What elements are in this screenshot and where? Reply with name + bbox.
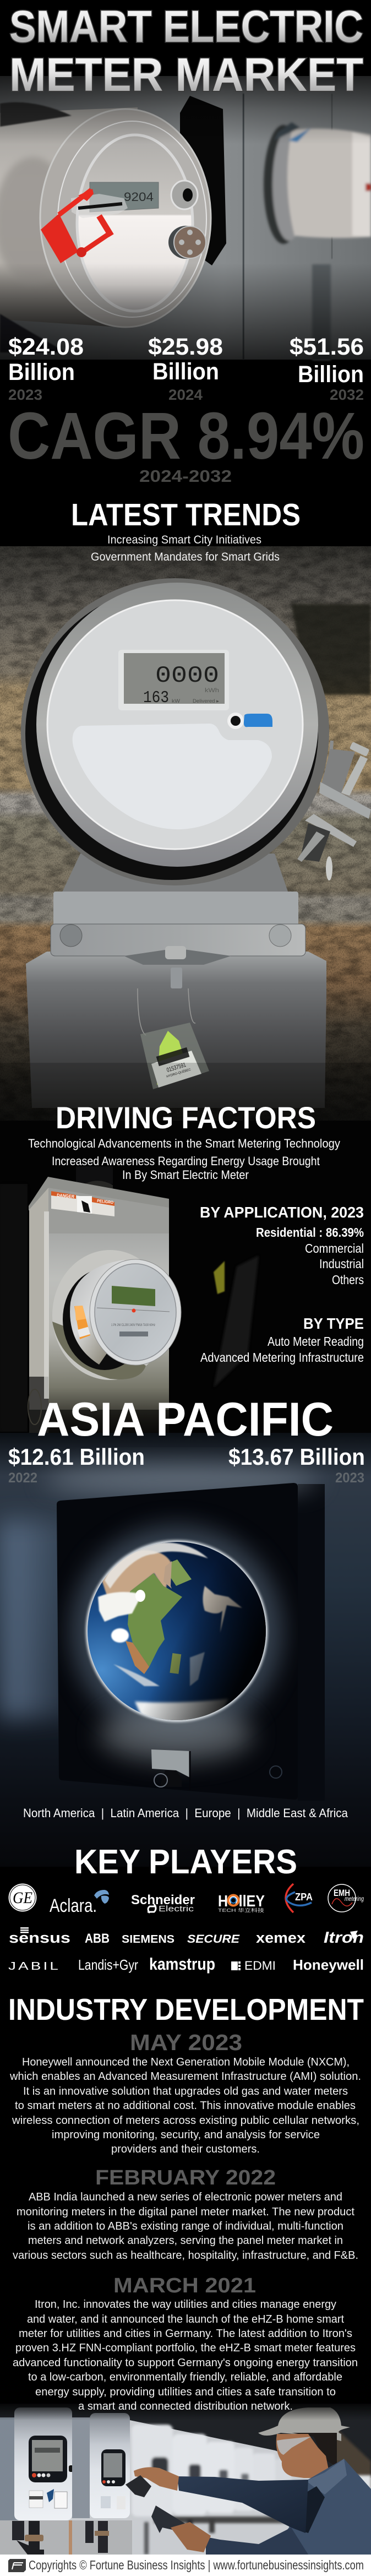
text block: Honeywell: improving monitoring, security, and analysis for service	[52, 2128, 320, 2141]
heading: LATEST TRENDS	[71, 497, 301, 532]
2022 value	[8, 1444, 145, 1486]
icon: steel mounting band	[51, 892, 305, 988]
logo: EDMI	[231, 1959, 276, 1972]
text block: Honeywell: Honeywell announced the Next Generation Mobile Module (NXCM),	[22, 2056, 350, 2068]
heading: DRIVING FACTORS	[56, 1100, 316, 1135]
stat: 2024 market value: Billion	[152, 358, 219, 385]
meter probe	[126, 2475, 151, 2497]
logo: Aclara: Aclara.	[50, 1895, 97, 1916]
logo: Xemex: xemex	[256, 1930, 305, 1946]
metal reset button	[168, 226, 206, 259]
panel: technician reading smart meters photo	[0, 2404, 371, 2555]
panel: dark photo of meter box	[0, 1121, 371, 1437]
2023 value	[228, 1444, 365, 1486]
logo: Siemens: SIEMENS	[122, 1933, 174, 1945]
icon: meter outer ring	[21, 578, 329, 885]
text block: ABB India	[13, 2191, 358, 2262]
date: May 2023: MAY 2023	[130, 2030, 242, 2055]
section: latest trends	[71, 497, 301, 563]
text block: Itron: and water, and it announced the launch of the eHZ-B home smart	[27, 2313, 344, 2325]
icon: white nameplate area	[73, 724, 272, 829]
icon: Fortune Business Insights logo	[8, 2559, 26, 2572]
factor item 2: In By Smart Electric Meter	[122, 1168, 249, 1182]
icon: meter bracket	[62, 854, 288, 893]
logo: Secure: SECURE	[187, 1933, 240, 1945]
trend item 2: Government Mandates for Smart Grids	[91, 550, 280, 563]
other regions list: North America | Latin America | Europe | Middle East & Africa	[23, 1806, 348, 1820]
land: southern desert	[126, 1641, 149, 1674]
section: industry development	[8, 1992, 364, 2297]
panel: meter on concrete wall photo	[0, 546, 371, 1121]
text block: Honeywell	[9, 2056, 361, 2155]
icon: dark wall panel	[57, 1483, 298, 1800]
text block: Itron	[13, 2298, 358, 2412]
ceiling shadow	[0, 2404, 371, 2478]
handheld reader	[151, 2506, 187, 2533]
stat: 2032 market value: 2032	[330, 387, 364, 403]
logo: Schneider Electric: Electric	[159, 1904, 194, 1914]
holding hand	[171, 2522, 211, 2552]
clouds	[105, 1542, 208, 1589]
LCD units: kWh	[205, 687, 219, 694]
2022 value: $12.61 Billion	[8, 1444, 145, 1470]
icon: meter enclosure	[28, 1166, 181, 1437]
orange barcode sticker	[74, 1306, 90, 1339]
logo: Kamstrup: kamstrup	[149, 1954, 215, 1974]
logo: Schneider Electric: Schneider	[131, 1893, 195, 1907]
logo: Jabil: JABIL	[8, 1960, 61, 1972]
trend item 1: Increasing Smart City Initiatives	[107, 533, 261, 546]
technician	[126, 2407, 371, 2555]
icon: meter LCD screen	[118, 650, 229, 710]
safety glasses	[277, 2437, 311, 2455]
segment list: by type	[200, 1315, 364, 1365]
segment list: by type: BY TYPE	[303, 1315, 364, 1332]
stat: 2023 market value: Billion	[8, 359, 75, 385]
panel: hero photo of smart meter with red seal	[0, 76, 371, 360]
icon: clear plastic seal	[71, 194, 128, 218]
text block: Itron: proven 3.HZ FNN-compliant portfolio, the eHZ-B smart meter features	[15, 2341, 356, 2354]
meter unit 1	[0, 2407, 72, 2520]
logo: EMH metering: EMH	[334, 1888, 350, 1898]
danger warning labels: PELIGRO	[97, 1198, 114, 1205]
logo: Landis+Gyr: Landis+Gyr	[78, 1957, 138, 1973]
meter green LCD	[112, 1286, 155, 1306]
factor item 2	[52, 1154, 320, 1182]
footer	[0, 2555, 371, 2576]
danger warning labels	[51, 1191, 114, 1216]
face	[276, 2434, 330, 2478]
meter unit 2	[72, 2413, 130, 2518]
text block: ABB India: ABB India launched a new series of electronic power meters and	[29, 2191, 342, 2203]
text block: Itron: advanced functionality to support Germany's ongoing energy transition	[13, 2356, 358, 2369]
heading: ASIA PACIFIC	[37, 1393, 334, 1446]
logo: EMH metering	[328, 1884, 364, 1912]
danger warning labels: DANGER	[57, 1193, 75, 1199]
work shirt torso	[287, 2459, 371, 2555]
segment list: by application: Others	[332, 1273, 364, 1287]
icon: glass dome of the hero meter	[40, 109, 211, 327]
text block: Itron: to a low-carbon, environmentally friendly, reliable, and affordable	[28, 2371, 342, 2383]
icon: meter LCD screen: kW	[172, 698, 181, 704]
text block: ABB India: various sectors such as healthcare, hospitality, infrastructure, and F&B.	[13, 2249, 358, 2262]
icon: black mounting strip behind the meter	[180, 96, 226, 265]
tag serial number: 01537591	[166, 1062, 187, 1074]
glass port knob	[171, 181, 198, 209]
hard hat	[258, 2407, 350, 2441]
text block: Honeywell: which enables an Advanced Measurement Infrastructure (AMI) solution.	[9, 2070, 361, 2083]
icon: panel socket	[151, 1749, 282, 1790]
text block: Itron: meter for utilities and cities in Germany. The latest addition to Itron's	[19, 2327, 352, 2340]
logo: Itron: Itron	[324, 1929, 364, 1947]
LCD main reading: 0000	[155, 662, 219, 689]
section: asia pacific	[8, 1393, 365, 1820]
icon: Hydro-Quebec seal tag	[138, 988, 209, 1089]
stat: 2023 market value	[8, 334, 84, 403]
icon: cylinder electric meter	[52, 1250, 181, 1380]
text block: Honeywell: It is an innovative solution that upgrades old gas and water meters	[23, 2085, 348, 2097]
stat: 2024 market value: 2024	[168, 387, 203, 403]
tag barcode	[156, 1047, 189, 1066]
text block: ABB India: meters and network analyzers, serving the panel meter market in	[28, 2234, 343, 2247]
LCD secondary reading: 163	[143, 688, 169, 708]
section: driving factors	[28, 1100, 340, 1182]
segment list: by application	[200, 1204, 364, 1287]
pipes under meters	[0, 2520, 132, 2555]
segment list: by application: Commercial	[305, 1241, 364, 1256]
lower sleeve	[206, 2528, 308, 2555]
stat: 2024 market value: $25.98	[148, 334, 223, 360]
factor item 1: Technological Advancements in the Smart Metering Technology	[28, 1137, 340, 1150]
logo: Sensus: sensus	[9, 1930, 70, 1946]
meter LCD display: 9204	[124, 190, 154, 204]
icon: meter LCD screen: Delivered ▸	[193, 698, 220, 704]
2023 value: 2023	[335, 1470, 364, 1486]
stat: CAGR: 2024-2032	[139, 466, 232, 486]
section: key players	[8, 1843, 364, 1974]
land: island	[170, 1653, 181, 1674]
land: green continent	[128, 1573, 182, 1667]
text block: Honeywell: to smart meters at no additional cost. This innovative module enables	[15, 2099, 356, 2112]
factor item 2: Increased Awareness Regarding Energy Usage Brought	[52, 1154, 320, 1168]
logo: ZPA: ZPA	[295, 1892, 313, 1903]
text block: Itron: energy supply, providing utilities and cities a safe transition to	[35, 2385, 336, 2398]
text block: Honeywell: wireless connection of meters across existing public cellular networks,	[12, 2114, 359, 2127]
meter barcode	[119, 1332, 148, 1336]
heading: KEY PLAYERS	[74, 1843, 297, 1881]
text block: ABB India: is an addition to ABB's existing range of individual, multi-function	[28, 2220, 343, 2232]
meter LCD display	[90, 182, 159, 212]
segment list: by application: BY APPLICATION, 2023	[200, 1204, 364, 1221]
logo: EMH metering: metering	[345, 1895, 364, 1903]
meter type plate text: 1 Ph 2W CL200 240V FM16 TA30 60Hz	[111, 1323, 155, 1327]
logo: Holley: HOllEY	[218, 1893, 265, 1910]
logo: ABB: ABB	[85, 1931, 110, 1946]
text block: Honeywell: providers and their customers.	[111, 2143, 260, 2155]
meter red LED	[132, 1308, 135, 1313]
hair	[292, 2433, 337, 2467]
icon: meter cylinder body	[0, 107, 138, 328]
blurred row of meters	[132, 2425, 292, 2555]
panel: glowing globe in wall panel	[0, 1433, 371, 1867]
logo: ZPA	[286, 1884, 313, 1912]
segment list: by application: Industrial	[319, 1257, 364, 1271]
title	[9, 2, 363, 101]
icon: out-of-focus meter on the right	[264, 122, 371, 244]
logo: Holley: TECH 华立科技	[218, 1907, 265, 1913]
date: March 2021: MARCH 2021	[113, 2274, 256, 2297]
stat: 2024 market value	[148, 334, 223, 403]
2022 value: 2022	[8, 1470, 37, 1486]
stat: 2023 market value: 2023	[8, 387, 42, 403]
stat: 2032 market value: $51.56	[290, 334, 364, 360]
logo: GE: GE	[13, 1889, 32, 1907]
land: tan desert	[102, 1550, 172, 1595]
stat: 2023 market value: $24.08	[8, 334, 84, 360]
text block: Itron: a smart and connected distribution network.	[78, 2400, 293, 2412]
icon: red security seal	[41, 189, 111, 263]
reaching hand	[134, 2467, 179, 2491]
reaching sleeve	[177, 2476, 308, 2533]
stat: 2032 market value	[290, 334, 364, 403]
panel glow around the globe	[71, 1525, 282, 1762]
text block: ABB India: monitoring meters in the digital panel meter market. The new product	[17, 2205, 354, 2218]
icon: meter socket box	[26, 952, 326, 1108]
stat: 2032 market value: Billion	[298, 361, 364, 388]
text block: Itron: Itron, Inc. innovates the way utilities and cities manage energy	[35, 2298, 337, 2311]
icon: earth globe	[86, 1540, 268, 1722]
date: February 2022: FEBRUARY 2022	[95, 2166, 276, 2189]
icon: optical port	[227, 713, 272, 729]
logo: EDMI: EDMI	[244, 1959, 276, 1972]
icon: side clamp hardware	[297, 741, 371, 881]
icon: Hydro-Quebec seal tag: HYDRO-QUÉBEC	[166, 1068, 192, 1079]
logo: GE	[9, 1883, 36, 1912]
logo: Honeywell: Honeywell	[293, 1957, 364, 1973]
